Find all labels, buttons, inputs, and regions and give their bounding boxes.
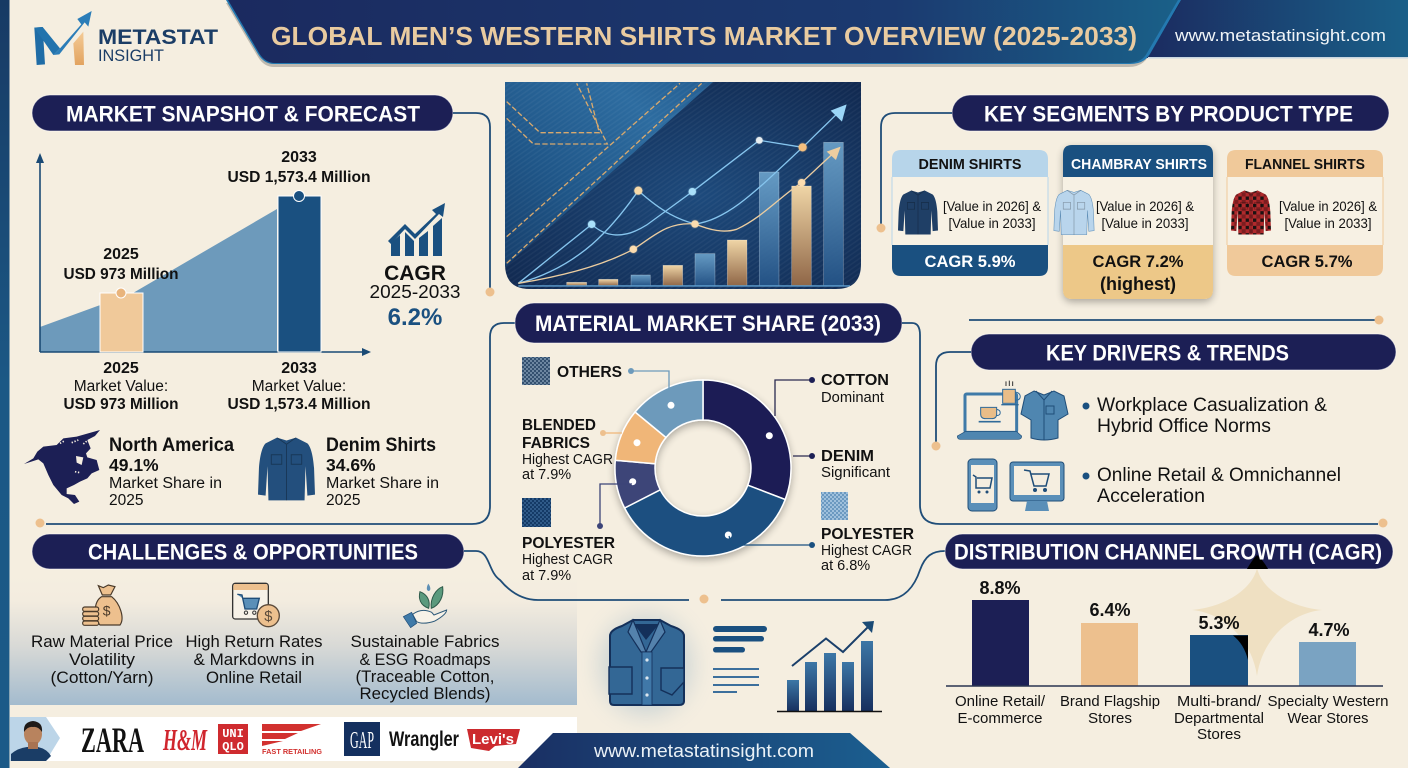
bar: specialty western: [1268, 620, 1388, 727]
icon: laptop with coffee: [957, 381, 1022, 439]
website top right: www.metastatinsight.com: [1174, 26, 1386, 45]
bar: multi-brand: Stores: [1197, 726, 1241, 743]
challenge: return rates: & Markdowns in: [194, 651, 314, 669]
heading: distribution: [945, 534, 1393, 569]
divider with end dot: [969, 316, 1384, 324]
driver: workplace casualization: Workplace Casualization &: [1097, 394, 1327, 416]
icon: casual shirt: [1021, 391, 1068, 440]
CAGR callout: [370, 262, 460, 331]
stat: North America share: Market Share in: [109, 475, 222, 492]
chart axis: [946, 685, 1383, 687]
logo: Wrangler: Wrangler: [389, 728, 459, 751]
title: GLOBAL MEN’S WESTERN SHIRTS MARKET OVERVIEW (2025-2033): [271, 23, 1137, 51]
heading: market snapshot: [32, 95, 453, 131]
driver: online retail: Online Retail & Omnichannel: [1097, 464, 1341, 486]
heading: key drivers: [971, 334, 1396, 370]
header banner: [226, 0, 1181, 67]
card: denim shirts: [892, 150, 1048, 276]
segment: cotton: [703, 380, 791, 500]
label: denim: [821, 448, 890, 481]
label below 2025 bar: USD 973 Million: [64, 396, 178, 413]
logo icon: [34, 11, 92, 65]
icon: money bag: [83, 585, 122, 625]
segment: denim: [615, 460, 660, 508]
label below 2033 bar: Market Value:: [252, 378, 346, 395]
driver: workplace casualization: [1082, 394, 1327, 437]
image: denim fabric with growth chart: [505, 82, 861, 289]
logo: Levi's: [467, 729, 520, 751]
logo: Metastat Insight: INSIGHT: [98, 46, 164, 65]
label below 2025 bar: [64, 360, 178, 413]
label below 2025 bar: 2025: [103, 360, 139, 377]
panel: challenges and opportunities: [31, 534, 945, 703]
footer website: www.metastatinsight.com: [593, 740, 814, 761]
card: chambray shirts: [Value in 2033]: [1102, 215, 1188, 231]
driver: workplace casualization: Hybrid Office Norms: [1097, 415, 1271, 437]
card: chambray shirts: (highest): [1100, 274, 1176, 294]
segment: blended fabrics: [615, 412, 666, 464]
card: flannel shirts: CAGR 5.7%: [1262, 252, 1352, 271]
connector: left panel frame to material: [36, 323, 515, 528]
logo: Gap: GAP: [350, 728, 374, 754]
icon: online cart with return: $: [264, 609, 272, 625]
label: polyester right: at 6.8%: [821, 558, 870, 574]
card: chambray shirts: [1054, 145, 1213, 299]
icon: money bag: $: [103, 603, 111, 619]
card: chambray shirts: CAGR 7.2%: [1092, 252, 1184, 271]
icon: CAGR growth: [388, 203, 445, 256]
bar: multi-brand: 5.3%: [1198, 613, 1240, 633]
label: blended fabrics: Highest CAGR: [522, 452, 613, 468]
label: cotton: [821, 372, 889, 406]
card: flannel shirts: [1227, 150, 1383, 276]
label: blended fabrics: FABRICS: [522, 435, 590, 452]
logo: Levi's: Levi's: [472, 731, 514, 748]
stat: denim shirts share: Denim Shirts: [326, 435, 436, 456]
logo: Uniqlo: QLO: [222, 740, 244, 754]
card: chambray shirts: [Value in 2026] &: [1096, 198, 1195, 214]
bar: specialty western: Wear Stores: [1288, 710, 1368, 727]
fabric swatch: polyester dark: [522, 498, 551, 527]
icon: mini growth bar chart: [777, 621, 882, 712]
opportunity: sustainable fabrics: Recycled Blends): [360, 685, 490, 703]
opportunity: sustainable fabrics: Sustainable Fabrics: [350, 633, 500, 651]
stat: denim shirts share: 2025: [326, 492, 360, 509]
icon: hand with plant: [403, 584, 447, 628]
heading: key drivers: KEY DRIVERS & TRENDS: [1046, 340, 1289, 366]
icon: desktop with cart: [1010, 462, 1064, 511]
label above 2033 bar: [228, 149, 370, 186]
icon: denim shirt: [898, 190, 938, 234]
logo: Metastat Insight: [34, 11, 218, 65]
presenter portrait: [10, 717, 60, 761]
driver: online retail: [1082, 464, 1341, 507]
label: polyester left: POLYESTER: [522, 535, 615, 552]
card: denim shirts: CAGR 5.9%: [924, 252, 1016, 271]
logo: H&M: H&M: [162, 722, 208, 757]
leader lines: [600, 371, 812, 545]
panel: distribution channel growth: [945, 534, 1393, 743]
area and bar chart: [36, 153, 371, 356]
challenge: return rates: High Return Rates: [186, 633, 322, 651]
logo wordmark: METASTAT: [98, 26, 218, 49]
panel: material market share: [515, 303, 914, 584]
heading: market snapshot: MARKET SNAPSHOT & FORECAST: [66, 102, 420, 126]
label: others: OTHERS: [557, 364, 622, 381]
bar: specialty western: Specialty Western: [1268, 693, 1388, 710]
bar: multi-brand: [1174, 613, 1264, 743]
label: denim: Significant: [821, 465, 890, 481]
label: denim: DENIM: [821, 448, 874, 465]
card: flannel shirts: [Value in 2026] &: [1279, 198, 1378, 214]
bar: specialty western: 4.7%: [1308, 620, 1350, 640]
CAGR callout: CAGR: [384, 262, 446, 285]
logo: Zara: ZARA: [81, 720, 144, 760]
CAGR callout: 2025-2033: [370, 281, 460, 302]
stat: denim shirts share: 34.6%: [326, 455, 376, 475]
decorative star artefact: [1192, 568, 1322, 676]
card: denim shirts: [Value in 2026] &: [943, 198, 1042, 214]
icon: folded denim shirt: [600, 615, 692, 715]
bar: online retail: 8.8%: [979, 578, 1021, 598]
stat: denim shirts share: Market Share in: [326, 475, 439, 492]
segment: others: [635, 380, 703, 438]
connector: snapshot to hero: [453, 113, 494, 296]
label: polyester left: Highest CAGR: [522, 552, 613, 568]
label: polyester left: at 7.9%: [522, 568, 571, 584]
stat: North America share: 2025: [109, 492, 143, 509]
opportunity: sustainable fabrics: (Traceable Cotton,: [356, 668, 494, 686]
logo: Uniqlo: [218, 724, 248, 754]
bar: online retail: E-commerce: [958, 710, 1042, 727]
bar: multi-brand: Departmental: [1174, 710, 1264, 727]
label: blended fabrics: [522, 417, 613, 483]
opportunity: sustainable fabrics: & ESG Roadmaps: [360, 651, 490, 669]
bar: brand flagship: 6.4%: [1089, 600, 1131, 620]
bar: online retail: Online Retail/: [955, 693, 1046, 710]
driver: online retail: Acceleration: [1097, 485, 1205, 507]
stat: denim shirts share: [326, 435, 439, 509]
challenge: return rates: [186, 633, 322, 687]
heading: challenges: CHALLENGES & OPPORTUNITIES: [88, 540, 418, 564]
card: chambray shirts: CHAMBRAY SHIRTS: [1071, 156, 1207, 173]
bar 2025: [100, 293, 143, 352]
label: polyester right: POLYESTER: [821, 526, 914, 543]
icon: flannel shirt: [1231, 190, 1271, 234]
brand logo strip: [10, 717, 577, 761]
stat: North America share: North America: [109, 435, 234, 456]
label: polyester right: Highest CAGR: [821, 543, 912, 559]
label below 2033 bar: 2033: [281, 360, 317, 377]
logo: Fast Retailing: [262, 724, 322, 756]
label: polyester left: [522, 535, 615, 584]
bar: online retail: [955, 578, 1046, 727]
leader end dots: [597, 368, 815, 548]
heading: material market share: MATERIAL MARKET SHARE (2033): [535, 311, 881, 336]
bar: brand flagship: [1060, 600, 1160, 727]
heading: key segments: [952, 95, 1389, 131]
top right website band: [1140, 0, 1408, 58]
connector: material to drivers frame: [902, 323, 1388, 528]
label: cotton: COTTON: [821, 372, 889, 389]
opportunity: sustainable fabrics: [350, 633, 500, 703]
fabric swatch: others: [522, 357, 550, 385]
donut chart: [615, 380, 791, 556]
card: denim shirts: DENIM SHIRTS: [918, 156, 1022, 173]
logo: Uniqlo: UNI: [222, 727, 244, 741]
label above 2033 bar: 2033: [281, 149, 317, 166]
label below 2033 bar: [228, 360, 370, 413]
challenge: raw material: [31, 633, 173, 687]
background band: challenges: [10, 575, 577, 705]
panel: key drivers and trends: [932, 334, 1396, 511]
logo: Gap: [344, 722, 380, 756]
icon: online cart with return: [233, 583, 279, 627]
bar: brand flagship: Brand Flagship: [1060, 693, 1160, 710]
card: flannel shirts: FLANNEL SHIRTS: [1245, 156, 1365, 173]
bar: multi-brand: Multi-brand/: [1177, 693, 1262, 710]
icon: text list lines: [713, 626, 767, 693]
card: denim shirts: [Value in 2033]: [948, 215, 1036, 231]
logo: Fast Retailing: FAST RETAILING: [262, 747, 322, 756]
connector: hero to segments: [876, 113, 952, 232]
label below 2033 bar: USD 1,573.4 Million: [228, 396, 370, 413]
donut markers: [629, 402, 773, 538]
label below 2025 bar: Market Value:: [74, 378, 168, 395]
bar 2033: [278, 196, 321, 352]
connector: drivers: [932, 352, 971, 450]
card: flannel shirts: [Value in 2033]: [1284, 215, 1372, 231]
label above 2033 bar: USD 1,573.4 Million: [228, 169, 370, 186]
icon: chambray shirt: [1054, 190, 1094, 235]
stat: North America share: 49.1%: [109, 455, 159, 475]
CAGR callout: 6.2%: [388, 304, 442, 331]
icon: phone with cart: [968, 459, 997, 511]
fabric swatch: polyester light: [821, 492, 848, 520]
challenge: raw material: Raw Material Price: [31, 633, 173, 651]
label above 2025 bar: [64, 246, 178, 283]
icon: denim shirt: [258, 438, 315, 500]
heading: key segments: KEY SEGMENTS BY PRODUCT TYPE: [984, 102, 1353, 126]
label above 2025 bar: 2025: [103, 246, 139, 263]
heading: material market share: [515, 303, 902, 343]
connector: challenges to bottom divider: [464, 551, 945, 604]
heading: challenges: [32, 534, 464, 569]
label above 2025 bar: USD 973 Million: [64, 266, 178, 283]
panel: key segments by product type: [876, 95, 1389, 299]
left edge strip: [0, 0, 10, 768]
label: blended fabrics: BLENDED: [522, 417, 596, 434]
footer banner: [518, 733, 890, 768]
challenge: return rates: Online Retail: [206, 669, 302, 687]
icon: North America map: [24, 430, 100, 504]
challenge: raw material: Volatility: [69, 651, 136, 669]
label: blended fabrics: at 7.9%: [522, 467, 571, 483]
challenge: raw material: (Cotton/Yarn): [50, 669, 154, 687]
label: polyester right: [821, 526, 914, 574]
segment: polyester: [625, 485, 785, 556]
bar: brand flagship: Stores: [1088, 710, 1132, 727]
stat: North America share: [109, 435, 234, 509]
label: cotton: Dominant: [821, 390, 884, 406]
panel: market snapshot and forecast: [24, 95, 495, 509]
